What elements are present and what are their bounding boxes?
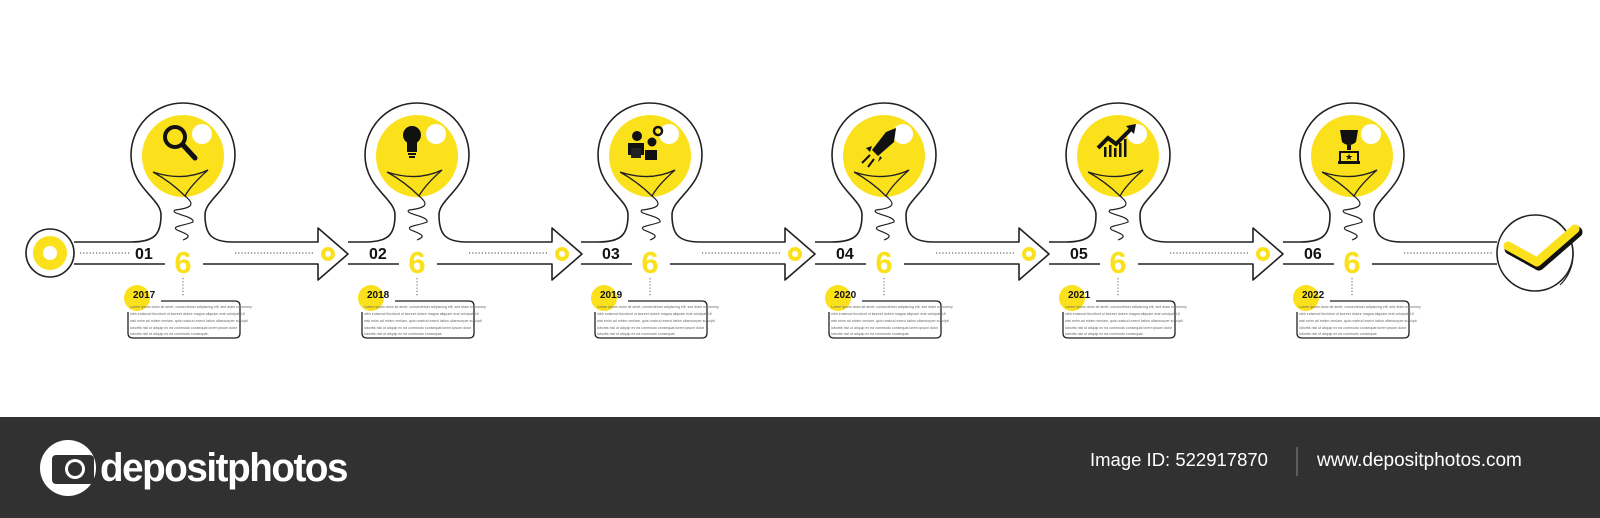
icon: light bulb — [403, 126, 421, 158]
step 3: teamwork: 03 — [602, 246, 620, 263]
step 5: growth chart: 05 — [1070, 246, 1088, 263]
start circle — [26, 229, 130, 277]
icon: chart arrow — [1098, 124, 1136, 157]
step 2: idea: 2018 — [367, 290, 390, 301]
step 6: trophy: wisi enim ad minim veniam, quis nostrud exerci tation ullamcorper suscipit — [1299, 319, 1417, 323]
step 6: trophy: Lorem ipsum dolor sit amet, consectetuer adipiscing elit, sed diam nonummy — [1299, 305, 1421, 309]
icon: trophy — [1338, 130, 1360, 164]
step 4: rocket — [815, 103, 1049, 338]
step 2: idea: 02 — [369, 246, 387, 263]
step 6: trophy: lobortis nisl ut aliquip ex ea commodo consequat. — [1299, 332, 1378, 336]
logo icon — [40, 440, 96, 496]
icon: trophy: ★ — [1345, 152, 1353, 162]
step 6: trophy: nibh euismod tincidunt ut laoreet dolore magna aliquam erat volutpat. Ut — [1299, 312, 1414, 316]
step 6: trophy: 06 — [1304, 246, 1322, 263]
end checkmark — [1497, 215, 1577, 291]
step 4: rocket: 2020 — [834, 290, 857, 301]
footer bar — [0, 417, 1600, 518]
step 4: rocket: 04 — [836, 246, 854, 263]
step 2: idea — [348, 103, 582, 338]
step 6: trophy: lobortis nisl ut aliquip ex ea commodo consequat lorem ipsum dolor — [1299, 326, 1407, 330]
bulb with road to end — [1283, 103, 1497, 264]
step 6: trophy: 6 — [1343, 245, 1361, 280]
step 5: growth chart — [1049, 103, 1283, 338]
step 3: teamwork — [581, 103, 815, 338]
icon: magnifier — [165, 127, 195, 158]
image id: Image ID: 522917870 — [1090, 449, 1268, 470]
step 1: search — [114, 103, 348, 338]
step 3: teamwork: 2019 — [600, 290, 623, 301]
step 6: trophy: 2022 — [1302, 290, 1325, 301]
icon: rocket — [862, 128, 896, 167]
logo text: depositphotos — [100, 446, 347, 490]
year 2017: 2017 — [133, 290, 156, 301]
step 6: trophy — [1283, 103, 1497, 338]
website: www.depositphotos.com — [1316, 450, 1522, 471]
number 01: 01 — [135, 246, 153, 263]
step 5: growth chart: 2021 — [1068, 290, 1091, 301]
icon: people with laptops — [628, 127, 662, 160]
